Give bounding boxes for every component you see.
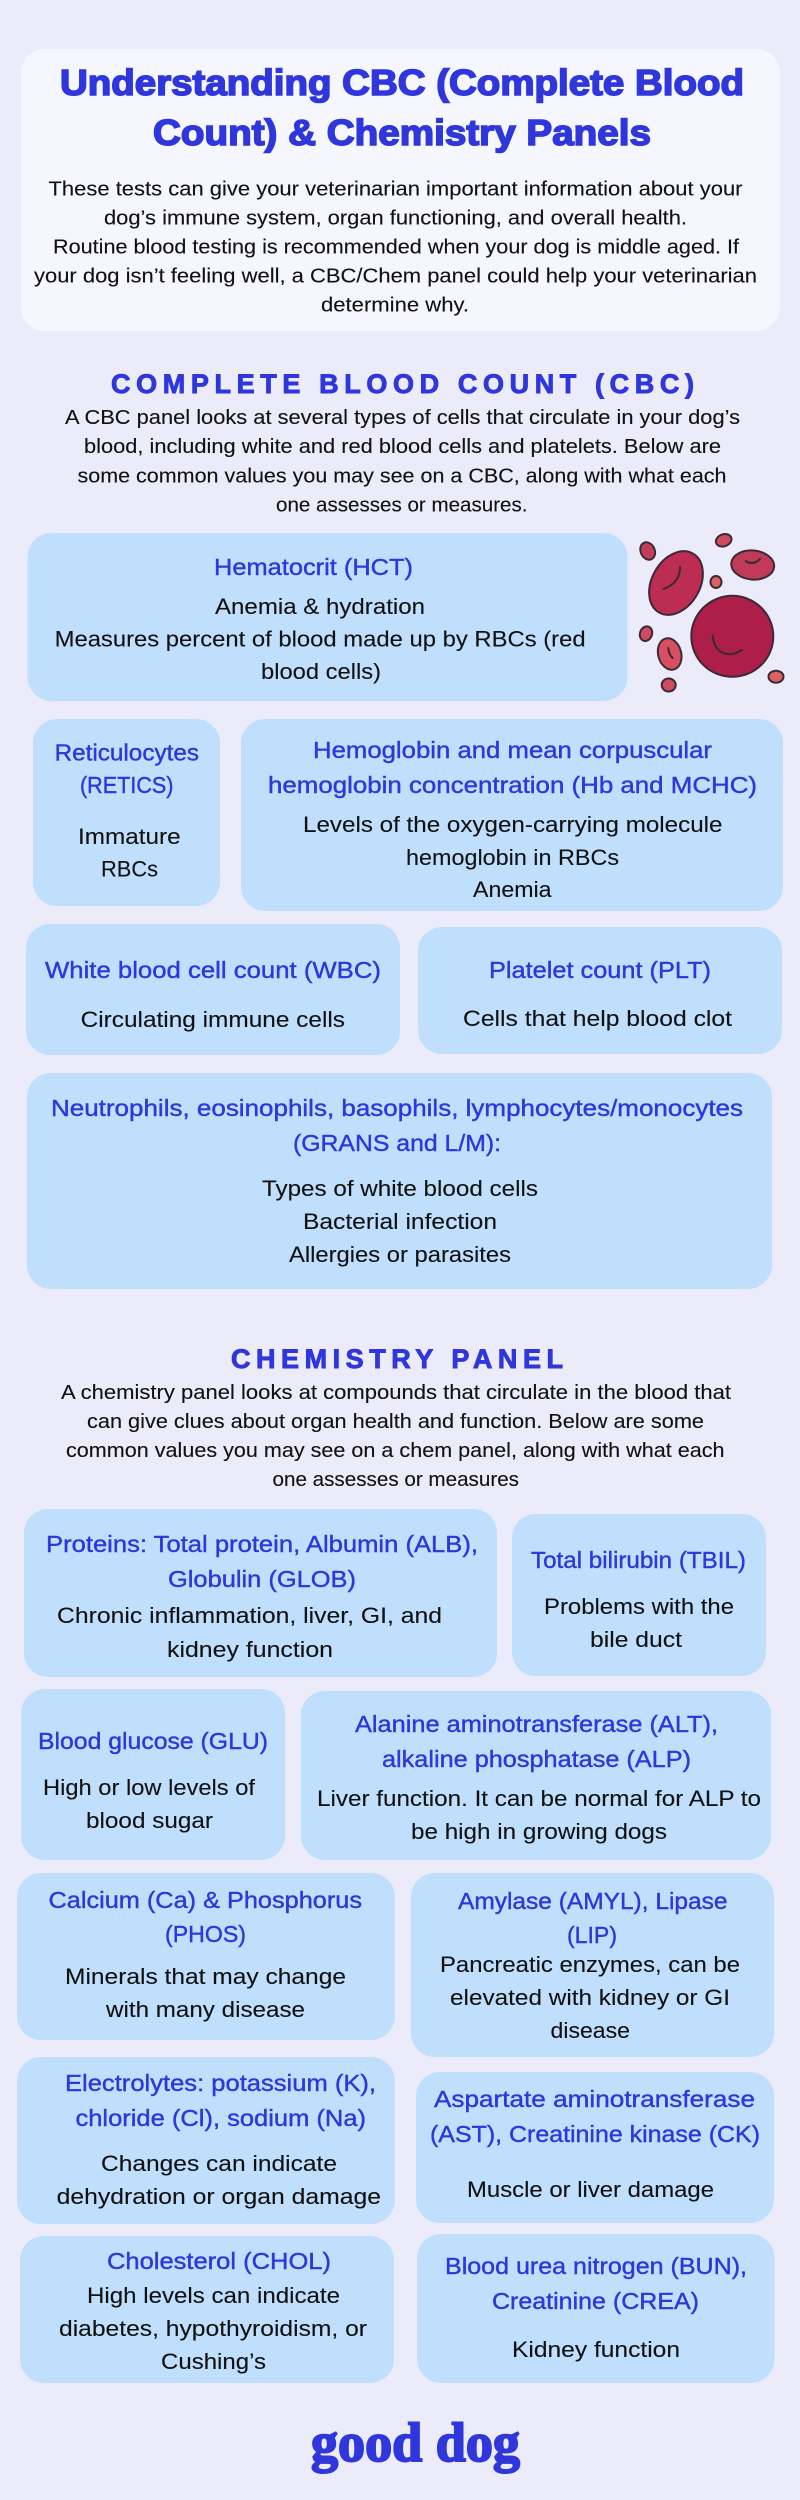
heading: blood glucose: Blood glucose (GLU) [38,1728,268,1754]
text: calcium and phosphorus description: with many disease [105,1997,305,2022]
logo: good dog: good dog [311,2412,520,2473]
heading: hemoglobin: Hemoglobin and mean corpuscular [313,737,712,763]
panel: introduction [21,49,780,331]
text: hematocrit description: Measures percent of blood made up by RBCs (red [55,627,586,652]
introduction text: Routine blood testing is recommended when your dog is middle aged. If [53,236,739,258]
text: proteins description: kidney function [167,1637,333,1662]
text: CBC description: some common values you may see on a CBC, along with what each [78,464,726,487]
text: hemoglobin description: Anemia [473,877,552,902]
text: electrolytes description [57,2151,381,2209]
text: electrolytes description: dehydration or organ damage [57,2184,381,2209]
text: electrolytes description: Changes can indicate [101,2151,337,2176]
text: WBC description: Circulating immune cells [81,1007,345,1032]
introduction text: dog’s immune system, organ functioning, and overall health. [104,206,687,230]
heading: ALT and ALP: alkaline phosphatase (ALP) [382,1746,691,1772]
text: ALT and ALP description [317,1786,761,1844]
panel: calcium and phosphorus [17,1873,395,2040]
text: blood glucose description [43,1775,256,1833]
text: reticulocytes description: RBCs [101,857,158,882]
introduction text: determine why. [321,293,469,316]
panel: proteins [24,1509,497,1677]
heading: reticulocytes: (RETICS) [80,772,174,798]
text: cholesterol description: High levels can indicate [87,2283,340,2308]
icon: red blood cells [638,532,784,692]
heading: white blood cell types [51,1095,743,1156]
heading: platelet count: Platelet count (PLT) [489,957,711,983]
panel: total bilirubin [512,1514,766,1676]
heading: AST and CK: (AST), Creatinine kinase (CK) [430,2121,760,2147]
heading: amylase and lipase: Amylase (AMYL), Lipase [458,1888,728,1914]
heading: hematocrit: Hematocrit (HCT) [214,554,413,580]
panel: BUN and creatinine [417,2234,774,2383]
text: amylase and lipase description: Pancreatic enzymes, can be [440,1952,740,1977]
heading: calcium and phosphorus: Calcium (Ca) & Phosphorus [48,1887,362,1913]
text: reticulocytes description: Immature [78,824,181,849]
heading: reticulocytes [55,740,199,798]
heading: proteins [46,1531,478,1592]
text: hemoglobin description: hemoglobin in RBCs [406,845,619,870]
heading: ALT and ALP: Alanine aminotransferase (ALT), [355,1711,718,1737]
heading: electrolytes: Electrolytes: potassium (K), [65,2070,376,2096]
text: blood glucose description: High or low levels of [43,1775,256,1800]
text: hemoglobin description [303,812,722,902]
heading: hemoglobin [268,737,757,798]
heading: white blood cell types: (GRANS and L/M): [293,1130,501,1156]
text: hematocrit description: Anemia & hydration [215,594,425,619]
text: white blood cell types description: Bacterial infection [303,1209,497,1234]
text: hematocrit description [55,594,586,684]
text: CBC description: one assesses or measures. [276,494,528,516]
text: cholesterol description [59,2283,367,2374]
text: calcium and phosphorus description: Minerals that may change [65,1964,346,1989]
heading: cholesterol: Cholesterol (CHOL) [107,2248,331,2274]
introduction text [34,177,757,316]
text: ALT and ALP description: Liver function. It can be normal for ALP to [317,1786,761,1811]
text: amylase and lipase description: elevated with kidney or GI [450,1985,730,2010]
introduction text: your dog isn’t feeling well, a CBC/Chem panel could help your veterinarian [34,265,757,288]
text: chemistry panel description [61,1381,731,1491]
text: AST and CK description: Muscle or liver damage [467,2177,714,2202]
text: proteins description: Chronic inflammation, liver, GI, and [57,1603,442,1628]
text: CBC description: blood, including white and red blood cells and platelets. Below are [84,435,721,458]
panel: amylase and lipase [411,1873,774,2057]
heading: amylase and lipase: (LIP) [567,1922,617,1948]
text: hemoglobin description: Levels of the oxygen-carrying molecule [303,812,722,837]
heading: electrolytes: chloride (Cl), sodium (Na) [76,2105,366,2131]
heading: proteins: Proteins: Total protein, Albumin (ALB), [46,1531,478,1557]
text: ALT and ALP description: be high in growing dogs [411,1819,667,1844]
heading: chemistry panel: CHEMISTRY PANEL [231,1344,563,1374]
text: hematocrit description: blood cells) [261,659,381,684]
heading: amylase and lipase [458,1888,728,1948]
text: BUN and creatinine description: Kidney function [512,2337,680,2362]
text: reticulocytes description [78,824,181,882]
heading: white blood cell types: Neutrophils, eosinophils, basophils, lymphocytes/monocytes [51,1095,743,1121]
heading: BUN and creatinine [445,2253,747,2314]
text: cholesterol description: Cushing’s [161,2349,266,2374]
text: total bilirubin description [544,1594,734,1652]
heading: ALT and ALP [355,1711,718,1772]
text: CBC description: A CBC panel looks at several types of cells that circulate in your dog’s [65,406,740,429]
heading: AST and CK: Aspartate aminotransferase [434,2086,755,2112]
panel: reticulocytes [33,719,220,906]
title [60,62,744,153]
introduction text: These tests can give your veterinarian important information about your [48,177,743,200]
panel: ALT and ALP [301,1691,771,1860]
panel: electrolytes [17,2057,395,2224]
text: white blood cell types description: Allergies or parasites [289,1242,511,1267]
text: CBC description [65,406,740,516]
panel: cholesterol [20,2236,394,2383]
heading: complete blood count: COMPLETE BLOOD COUNT (CBC) [111,369,694,399]
heading: BUN and creatinine: Blood urea nitrogen (BUN), [445,2253,747,2279]
panel: platelet count [418,927,782,1054]
panel: white blood cell types [27,1073,772,1289]
text: total bilirubin description: bile duct [590,1627,682,1652]
text: chemistry panel description: one assesses or measures [272,1468,519,1491]
title: Understanding CBC (Complete Blood [60,62,744,103]
panel: AST and CK [416,2072,774,2223]
heading: reticulocytes: Reticulocytes [55,740,199,766]
panel: hemoglobin [241,719,783,911]
text: white blood cell types description [262,1176,538,1267]
heading: BUN and creatinine: Creatinine (CREA) [492,2288,699,2314]
heading: proteins: Globulin (GLOB) [168,1566,356,1592]
heading: calcium and phosphorus [48,1887,362,1947]
heading: total bilirubin: Total bilirubin (TBIL) [531,1547,746,1573]
text: calcium and phosphorus description [65,1964,346,2022]
text: platelet description: Cells that help blood clot [463,1006,732,1031]
title: Count) & Chemistry Panels [153,112,651,153]
text: white blood cell types description: Types of white blood cells [262,1176,538,1201]
text: amylase and lipase description: disease [550,2018,630,2043]
text: chemistry panel description: can give clues about organ health and function. Below are some [87,1410,704,1433]
text: proteins description [57,1603,442,1662]
text: total bilirubin description: Problems with the [544,1594,734,1619]
text: chemistry panel description: A chemistry panel looks at compounds that circulate in the blood that [61,1381,731,1404]
heading: hemoglobin: hemoglobin concentration (Hb and MCHC) [268,772,757,798]
text: chemistry panel description: common values you may see on a chem panel, along with what each [66,1439,725,1462]
heading: AST and CK [430,2086,760,2147]
heading: electrolytes [65,2070,376,2131]
text: blood glucose description: blood sugar [86,1808,213,1833]
heading: calcium and phosphorus: (PHOS) [165,1921,246,1947]
panel: blood glucose [21,1689,285,1860]
panel: hematocrit [28,533,628,701]
text: amylase and lipase description [440,1952,740,2043]
panel: white blood cell count [26,924,400,1055]
text: cholesterol description: diabetes, hypothyroidism, or [59,2316,367,2341]
heading: white blood cell count: White blood cell count (WBC) [45,957,381,983]
